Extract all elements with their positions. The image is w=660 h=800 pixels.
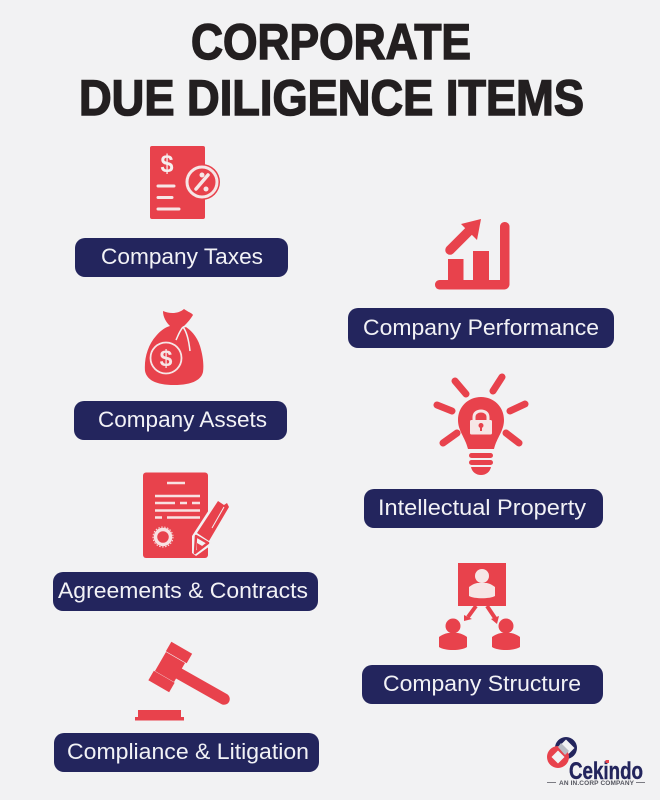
logo: Cekindo: AN IN.CORP COMPANY	[559, 780, 635, 787]
label: company taxes: Company Taxes	[101, 244, 263, 269]
icon: gavel	[135, 642, 224, 720]
icon: money bag	[145, 309, 203, 385]
label: company performance	[348, 308, 614, 348]
label: company structure	[362, 665, 603, 704]
icon: company taxes document	[150, 146, 220, 219]
icon: contract with pencil	[143, 472, 231, 558]
icon: organisation structure	[439, 563, 520, 650]
title	[79, 14, 584, 126]
label: company performance: Company Performance	[363, 315, 599, 340]
label: agreements and contracts: Agreements & Contracts	[58, 578, 308, 603]
icon: rising bar chart	[435, 219, 510, 290]
logo: Cekindo	[547, 737, 645, 787]
label: company taxes	[75, 238, 288, 277]
title: DUE DILIGENCE ITEMS	[79, 70, 584, 126]
label: company assets	[74, 401, 287, 440]
icon: money bag: $	[160, 346, 173, 372]
label: intellectual property: Intellectual Property	[378, 495, 586, 520]
label: compliance and litigation	[54, 733, 319, 772]
label: agreements and contracts	[53, 572, 318, 611]
label: compliance and litigation: Compliance & Litigation	[67, 739, 309, 764]
label: company assets: Company Assets	[98, 407, 267, 432]
icon: company taxes document: $	[160, 150, 174, 178]
label: company structure: Company Structure	[383, 671, 581, 696]
icon: light bulb with lock	[437, 377, 525, 475]
label: intellectual property	[364, 489, 603, 528]
title: CORPORATE	[191, 14, 471, 70]
